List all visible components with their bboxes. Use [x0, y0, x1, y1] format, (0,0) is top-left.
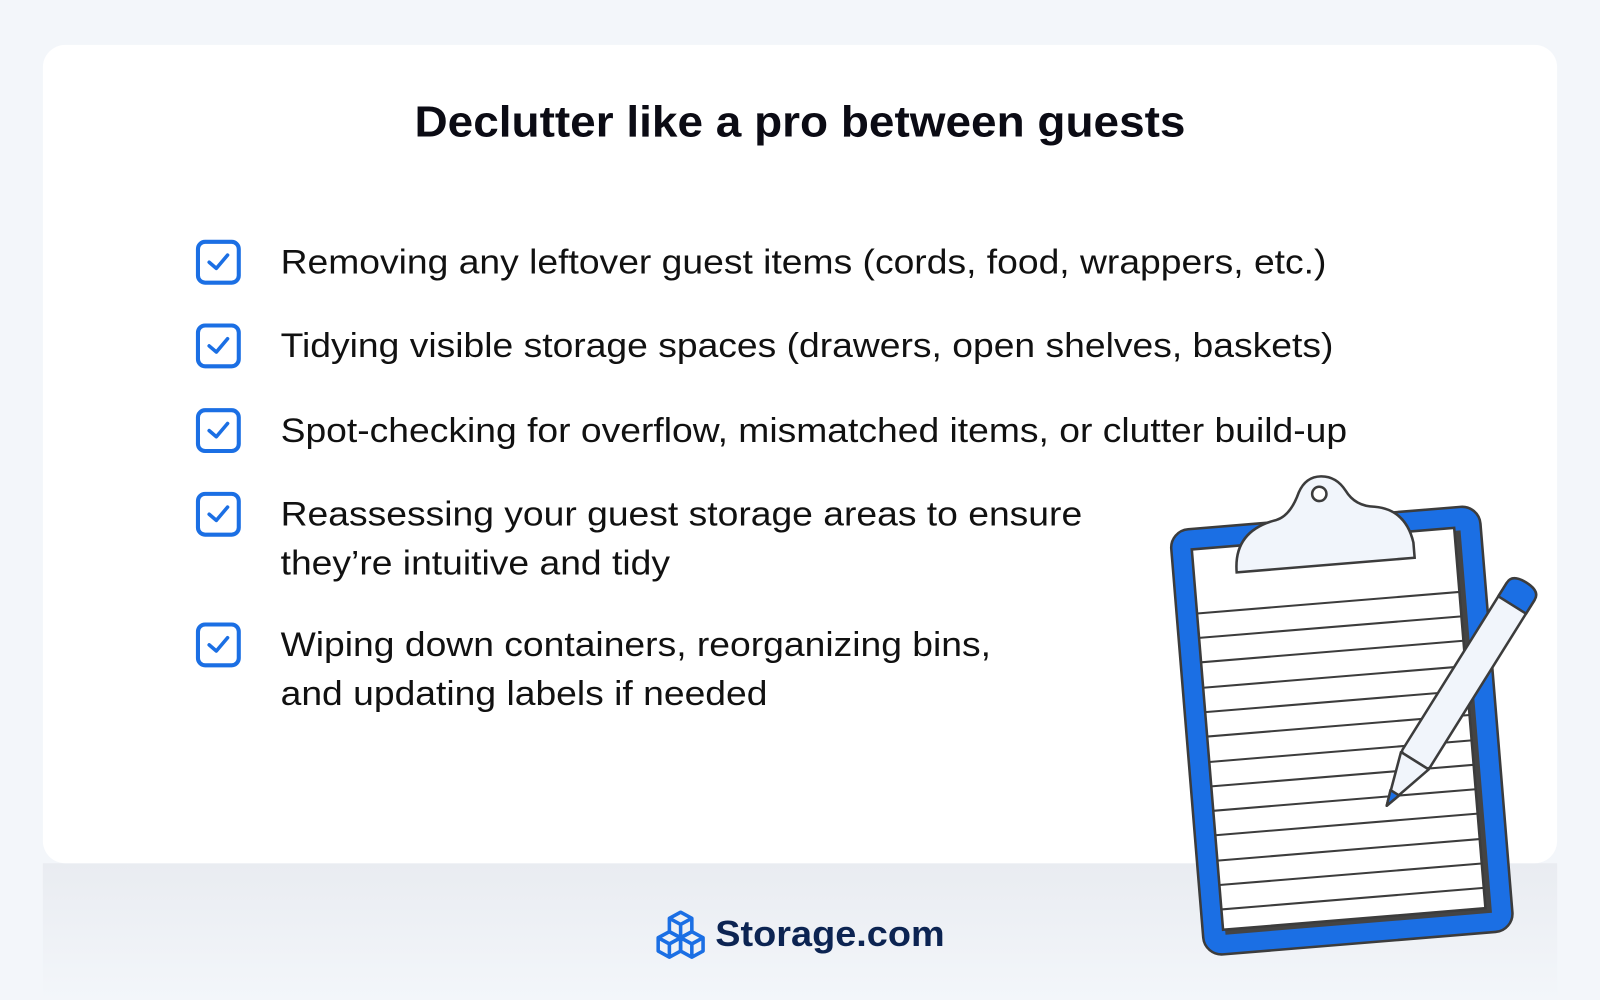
illustration: clipboard with pencil: [1170, 475, 1538, 956]
checklist item 2: Tidying visible storage spaces (drawers, open shelves, baskets): [281, 328, 1333, 365]
checklist item 4: [196, 492, 1082, 583]
checklist item 4: they’re intuitive and tidy: [281, 545, 670, 583]
checklist item 5: Wiping down containers, reorganizing bins,: [281, 627, 991, 664]
checklist item 5: and updating labels if needed: [281, 676, 767, 713]
checklist item 5: [196, 622, 991, 713]
checklist item 3: Spot-checking for overflow, mismatched items, or clutter build-up: [281, 412, 1347, 450]
logo: Storage.com: Storage.com: [715, 914, 945, 954]
checklist item 4: Reassessing your guest storage areas to ensure: [281, 496, 1082, 534]
panel: main card: [43, 45, 1557, 863]
checklist item 1: Removing any leftover guest items (cords, food, wrappers, etc.): [281, 244, 1326, 282]
logo: Storage.com: [656, 910, 945, 959]
title: Declutter like a pro between guests: [414, 98, 1185, 147]
